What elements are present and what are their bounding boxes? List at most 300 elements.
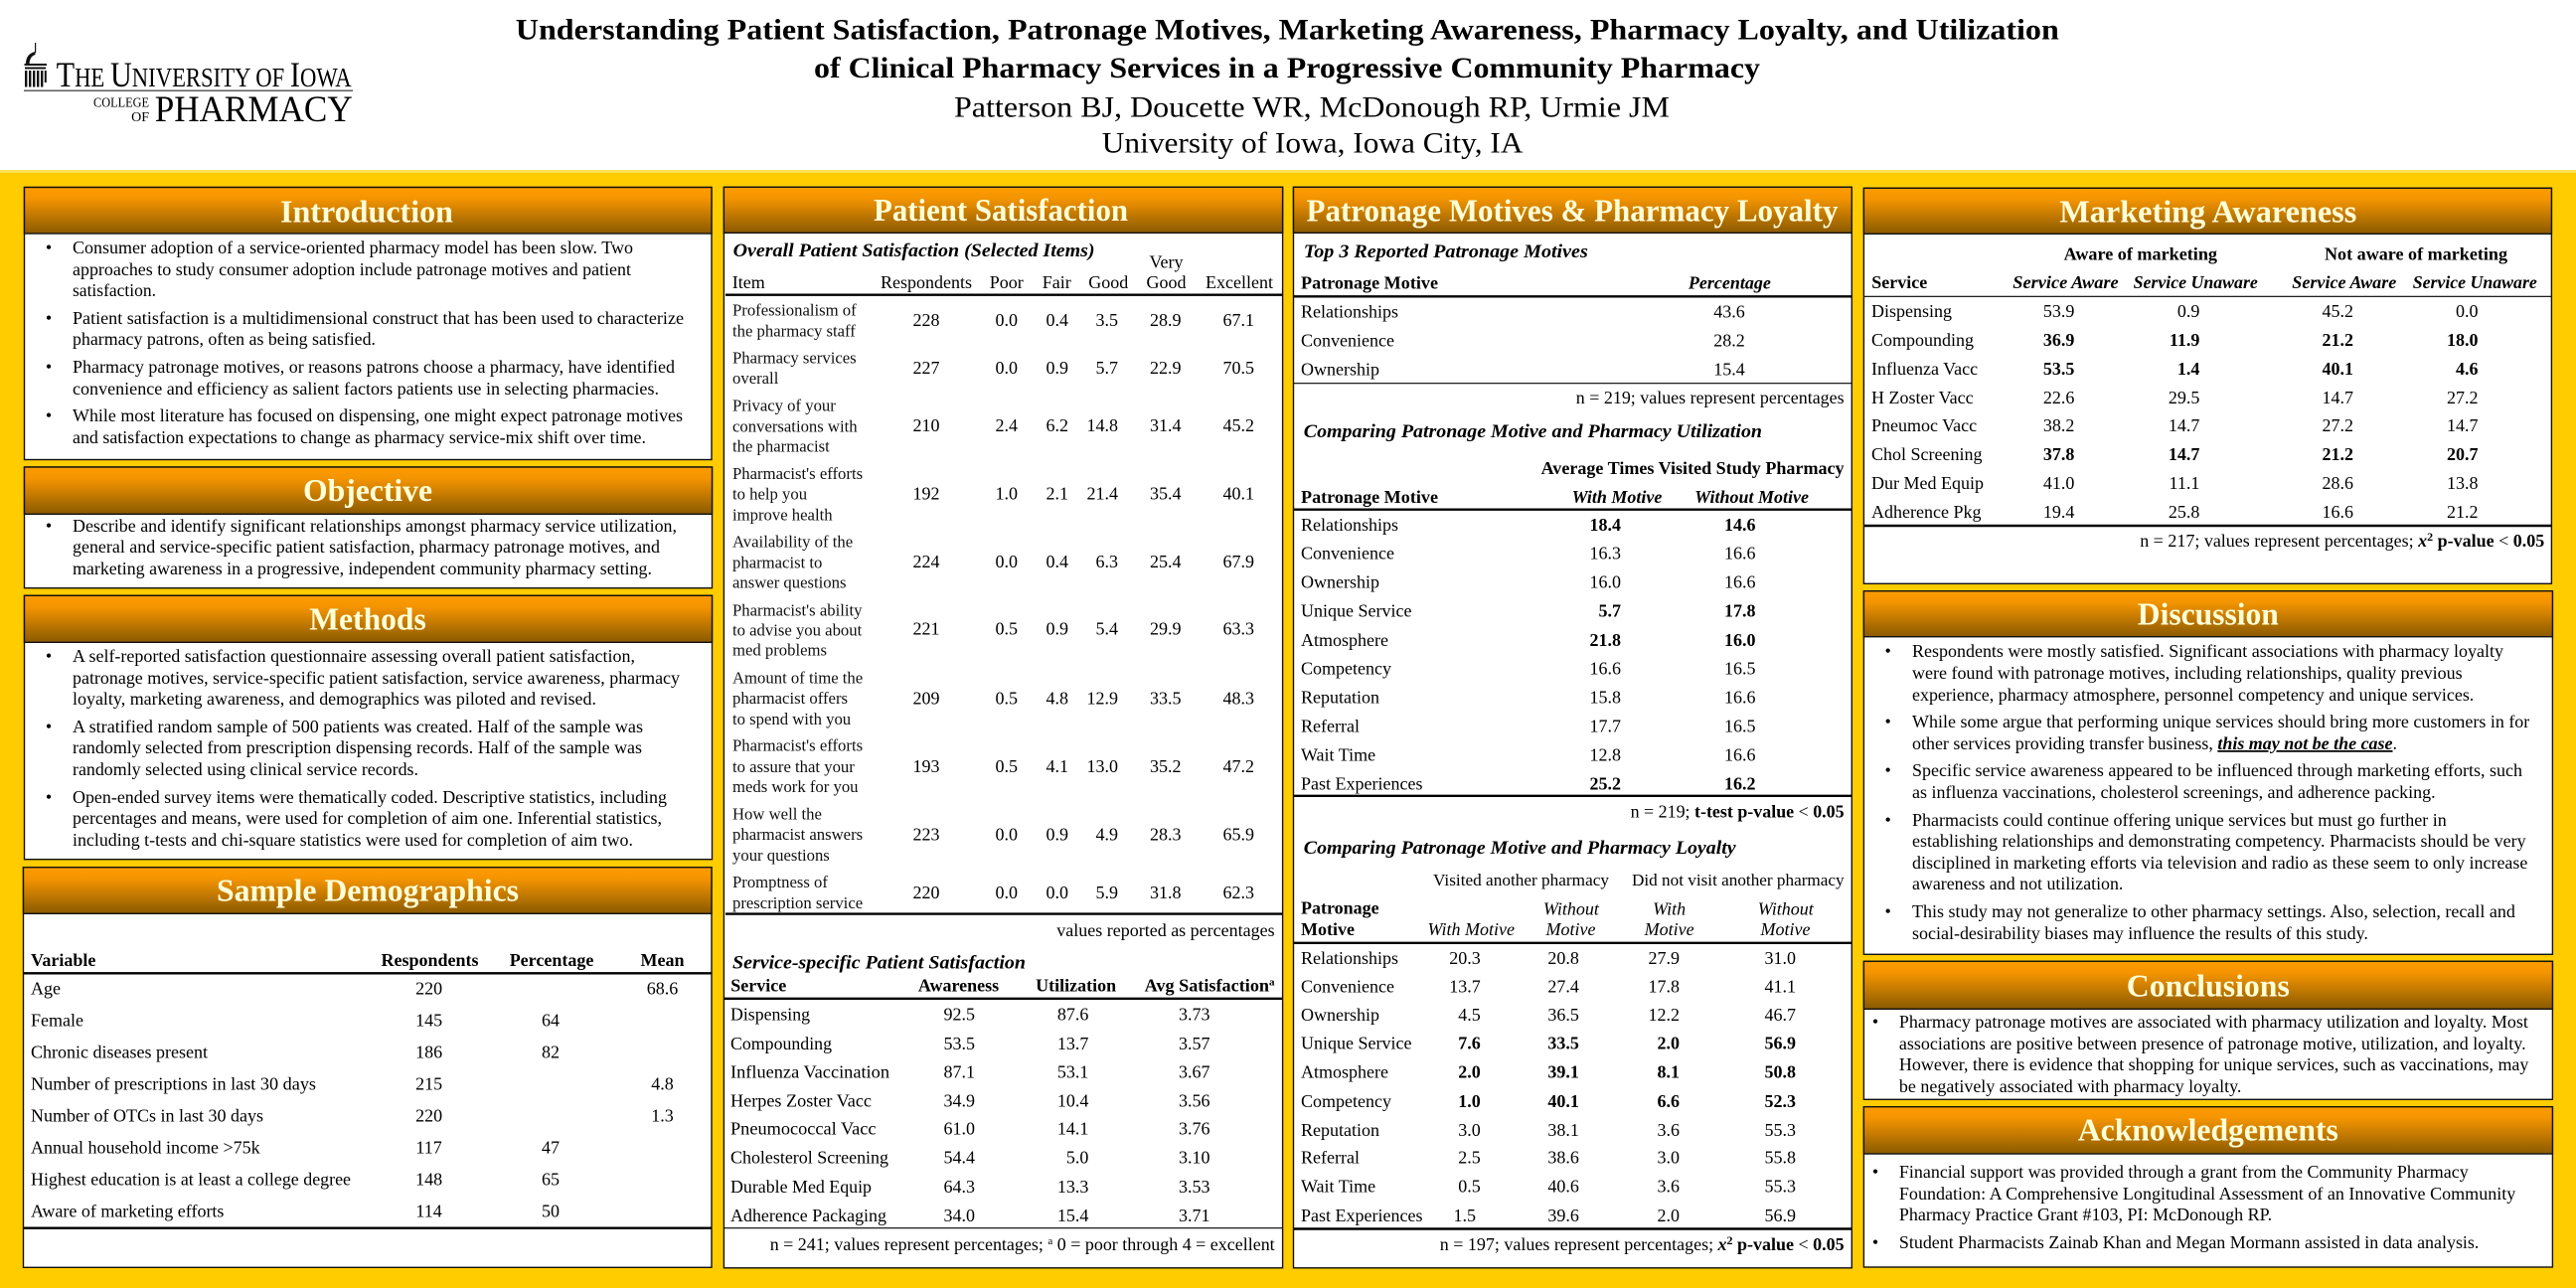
table: patronage motive and loyalty: 55.3 <box>1765 1120 1796 1140</box>
table: overall patient satisfaction: meds work for you <box>732 777 859 796</box>
table: demographics: 148 <box>415 1170 442 1190</box>
table: overall patient satisfaction: overall <box>732 369 779 388</box>
table: marketing awareness <box>1864 244 2551 551</box>
table: patronage motive and loyalty: 4.5 <box>1458 1005 1481 1025</box>
table: patronage motive and utilization: Wait Time <box>1301 745 1375 765</box>
table: overall patient satisfaction: Promptness of <box>732 873 828 891</box>
table: overall patient satisfaction: the pharmacist <box>732 436 830 455</box>
table: service-specific patient satisfaction: Cholesterol Screening <box>730 1148 888 1168</box>
table: overall patient satisfaction: pharmacist offers <box>732 689 848 708</box>
table: top 3 patronage motives: 28.2 <box>1713 331 1745 351</box>
heading: Methods: Methods <box>309 601 426 637</box>
table: patronage motive and loyalty: 39.1 <box>1547 1062 1579 1082</box>
text block: discussion bullets: experience, pharmacy atmosphere, personnel competency and unique services. <box>1912 685 2474 705</box>
table: patronage motive and loyalty: 52.3 <box>1765 1091 1796 1111</box>
table: patronage motive and utilization: Without Motive <box>1694 487 1809 507</box>
table: patronage motive and utilization: 16.3 <box>1590 544 1621 564</box>
table: demographics: 145 <box>415 1011 442 1031</box>
text block: introduction bullets: Pharmacy patronage motives, or reasons patrons choose a pharmacy, have identified <box>73 357 675 377</box>
table: overall patient satisfaction: pharmacist answers <box>732 825 863 844</box>
title: Understanding Patient Satisfaction, Patronage Motives, Marketing Awareness, Pharmacy Loyalty, and Utilization <box>516 13 2059 46</box>
table: patronage motive and loyalty: Comparing Patronage Motive and Pharmacy Loyalty <box>1304 838 1736 859</box>
table: service-specific patient satisfaction: Avg Satisfaction <box>1145 976 1268 996</box>
table: service-specific patient satisfaction: Adherence Packaging <box>730 1206 886 1225</box>
table: overall patient satisfaction: Fair <box>1043 272 1071 292</box>
table: patronage motive and loyalty: Without <box>1543 898 1600 918</box>
table: patronage motive and utilization: n = 219; t-test p-value < 0.05 <box>1631 801 1845 821</box>
table: patronage motive and loyalty: 2.0 <box>1458 1062 1481 1082</box>
table: overall patient satisfaction: 67.1 <box>1222 310 1254 330</box>
table: marketing awareness: 20.7 <box>2447 444 2479 464</box>
table: overall patient satisfaction: 220 <box>912 883 940 902</box>
table: service-specific patient satisfaction: 3.56 <box>1179 1091 1210 1111</box>
table: patronage motive and utilization: Ownership <box>1301 572 1379 592</box>
text block: discussion bullets: • <box>1885 901 1891 921</box>
table: overall patient satisfaction: 70.5 <box>1222 358 1254 378</box>
table: overall patient satisfaction: 22.9 <box>1150 358 1181 378</box>
table: service-specific patient satisfaction: 15.4 <box>1057 1206 1088 1225</box>
table: patronage motive and loyalty: 40.6 <box>1547 1177 1579 1197</box>
table: service-specific patient satisfaction: Pneumococcal Vacc <box>730 1119 877 1139</box>
table: overall patient satisfaction: 47.2 <box>1222 756 1254 776</box>
table: service-specific patient satisfaction: 14.1 <box>1057 1119 1088 1139</box>
table: overall patient satisfaction: 40.1 <box>1222 484 1254 504</box>
table: demographics: 47 <box>542 1138 560 1158</box>
text block: conclusions: associations are positive between presence of patronage motive, utilization, and loyalty. <box>1899 1034 2526 1053</box>
heading: Discussion: Discussion <box>2138 595 2279 631</box>
table: overall patient satisfaction: med problems <box>732 640 827 659</box>
table: patronage motive and utilization: 16.6 <box>1724 745 1755 765</box>
table: overall patient satisfaction: 5.9 <box>1095 883 1118 902</box>
table: marketing awareness: 14.7 <box>2169 444 2199 464</box>
table: service-specific patient satisfaction: Awareness <box>918 976 999 996</box>
table: overall patient satisfaction: Poor <box>990 272 1024 292</box>
text block: acknowledgements <box>1872 1162 2516 1252</box>
table: overall patient satisfaction: 4.1 <box>1046 756 1068 776</box>
table: service-specific patient satisfaction: 3.10 <box>1179 1148 1210 1168</box>
table: overall patient satisfaction: 35.4 <box>1150 484 1181 504</box>
table: marketing awareness: 21.2 <box>2322 330 2353 350</box>
table: patronage motive and loyalty: 33.5 <box>1547 1034 1579 1053</box>
table: demographics: 64 <box>542 1011 560 1031</box>
table: top 3 patronage motives <box>1294 242 1852 407</box>
text block: introduction bullets: Patient satisfaction is a multidimensional construct that has been used to characterize <box>73 308 684 328</box>
text block: discussion bullets <box>1885 641 2529 943</box>
table: overall patient satisfaction: prescription service <box>732 893 863 912</box>
table: overall patient satisfaction: 223 <box>912 824 940 844</box>
text block: discussion bullets: While some argue that performing unique services should bring more customers in for <box>1912 712 2529 731</box>
table: patronage motive and loyalty: 31.0 <box>1765 948 1796 968</box>
panel: Objective <box>24 467 712 588</box>
table: marketing awareness: 21.2 <box>2447 502 2479 522</box>
table: patronage motive and loyalty: 2.5 <box>1458 1148 1481 1168</box>
table: patronage motive and loyalty: 3.0 <box>1658 1148 1680 1168</box>
table: top 3 patronage motives: Top 3 Reported Patronage Motives <box>1304 242 1588 262</box>
table: marketing awareness: 1.4 <box>2177 359 2199 379</box>
table: marketing awareness: Dispensing <box>1871 301 1952 321</box>
table: patronage motive and loyalty: 56.9 <box>1765 1206 1796 1225</box>
text block: objective <box>46 516 677 578</box>
table: overall patient satisfaction: Good <box>1147 272 1187 292</box>
table: overall patient satisfaction: 6.3 <box>1095 552 1118 571</box>
table: patronage motive and utilization: 16.6 <box>1724 572 1755 592</box>
table: patronage motive and loyalty: 13.7 <box>1449 977 1481 997</box>
table: patronage motive and utilization: 16.0 <box>1724 630 1755 650</box>
table: marketing awareness: 36.9 <box>2043 330 2074 350</box>
table: overall patient satisfaction: 62.3 <box>1222 883 1254 902</box>
table: marketing awareness: 53.9 <box>2043 301 2074 321</box>
table: service-specific patient satisfaction: 92.5 <box>944 1005 975 1025</box>
table: overall patient satisfaction: pharmacist to <box>732 553 822 571</box>
table: patronage motive and loyalty: 36.5 <box>1547 1005 1579 1025</box>
table: overall patient satisfaction: 12.9 <box>1087 688 1118 708</box>
table: marketing awareness: Not aware of marketing <box>2325 244 2507 264</box>
heading: Conclusions: Conclusions <box>2127 967 2290 1003</box>
table: overall patient satisfaction: 6.2 <box>1046 415 1068 435</box>
table: overall patient satisfaction: 0.5 <box>996 756 1018 776</box>
table: overall patient satisfaction: 4.8 <box>1046 688 1068 708</box>
table: marketing awareness: H Zoster Vacc <box>1871 388 1974 407</box>
table: overall patient satisfaction: Very <box>1149 251 1183 271</box>
text block: introduction bullets: • <box>46 405 52 425</box>
table: patronage motive and loyalty: Motive <box>1644 919 1694 939</box>
text block: acknowledgements: Financial support was provided through a grant from the Community Pharmacy <box>1899 1162 2469 1182</box>
table: overall patient satisfaction: 28.9 <box>1150 310 1181 330</box>
table: demographics: 220 <box>415 979 442 999</box>
table: patronage motive and loyalty <box>1294 838 1852 1254</box>
table: patronage motive and loyalty: 2.0 <box>1658 1206 1680 1225</box>
table: marketing awareness: 27.2 <box>2447 388 2479 407</box>
table: patronage motive and utilization: Competency <box>1301 658 1391 678</box>
table: patronage motive and loyalty: 2 <box>1727 1233 1733 1247</box>
table: top 3 patronage motives: 15.4 <box>1713 359 1745 379</box>
table: patronage motive and loyalty: 7.6 <box>1458 1034 1481 1053</box>
heading: Acknowledgements <box>1863 1107 2552 1154</box>
table: demographics: 82 <box>542 1043 560 1062</box>
table: service-specific patient satisfaction: 54.4 <box>944 1148 975 1168</box>
table: service-specific patient satisfaction: 5.0 <box>1066 1148 1088 1168</box>
table: patronage motive and loyalty: Motive <box>1545 919 1595 939</box>
table: service-specific patient satisfaction: 34.0 <box>944 1206 975 1225</box>
table: patronage motive and loyalty: 41.1 <box>1765 977 1796 997</box>
table: overall patient satisfaction: 35.2 <box>1150 756 1181 776</box>
panel: Methods <box>24 595 712 860</box>
table: overall patient satisfaction: 28.3 <box>1150 824 1181 844</box>
text block: discussion bullets: • <box>1885 712 1891 731</box>
table: overall patient satisfaction: 0.4 <box>1046 552 1068 571</box>
table: marketing awareness: Influenza Vacc <box>1871 359 1978 379</box>
table: patronage motive and utilization: 21.8 <box>1590 630 1621 650</box>
text block: methods bullets: randomly selected using clinical service records. <box>73 759 418 779</box>
table: marketing awareness: 22.6 <box>2043 388 2074 407</box>
table: overall patient satisfaction: Respondents <box>881 272 972 292</box>
table: overall patient satisfaction: your questions <box>732 846 830 865</box>
table: overall patient satisfaction: 0.0 <box>996 824 1018 844</box>
table: demographics: Annual household income >75k <box>31 1138 260 1158</box>
table: patronage motive and loyalty: Motive <box>1760 919 1810 939</box>
table: overall patient satisfaction: Pharmacist's efforts <box>732 736 863 755</box>
table: patronage motive and loyalty: With Motive <box>1427 919 1515 939</box>
title: of Clinical Pharmacy Services in a Progressive Community Pharmacy <box>814 52 1760 84</box>
table: patronage motive and loyalty: 50.8 <box>1765 1062 1796 1082</box>
table: demographics: Number of OTCs in last 30 days <box>31 1106 263 1126</box>
table: overall patient satisfaction: 228 <box>912 310 940 330</box>
table: marketing awareness: 27.2 <box>2322 415 2353 435</box>
panel: Marketing Awareness <box>1863 188 2551 583</box>
table: overall patient satisfaction: How well the <box>732 805 822 824</box>
table: overall patient satisfaction: 63.3 <box>1222 619 1254 639</box>
table: overall patient satisfaction: 45.2 <box>1222 415 1254 435</box>
text block: introduction bullets: • <box>46 308 52 328</box>
table: patronage motive and utilization <box>1294 421 1852 821</box>
table: service-specific patient satisfaction: Service <box>730 976 786 996</box>
table: overall patient satisfaction: to advise you about <box>732 620 863 639</box>
table: top 3 patronage motives: Patronage Motive <box>1301 273 1438 293</box>
table: overall patient satisfaction: 48.3 <box>1222 688 1254 708</box>
text block: discussion bullets: Respondents were mostly satisfied. Significant associations with pharmacy loyalty <box>1912 641 2503 661</box>
table: patronage motive and loyalty: 17.8 <box>1648 977 1680 997</box>
table: overall patient satisfaction: 5.7 <box>1095 358 1118 378</box>
table: overall patient satisfaction: 0.9 <box>1046 824 1068 844</box>
panel: Patronage Motives & Pharmacy Loyalty <box>1294 187 1852 1268</box>
table: marketing awareness: 11.1 <box>2170 473 2199 493</box>
table: service-specific patient satisfaction: 3.57 <box>1179 1034 1210 1053</box>
table: overall patient satisfaction: the pharmacy staff <box>732 321 856 340</box>
table: marketing awareness: 19.4 <box>2043 502 2074 522</box>
table: patronage motive and utilization: 15.8 <box>1590 688 1621 708</box>
table: patronage motive and loyalty: Referral <box>1301 1148 1360 1168</box>
table: patronage motive and loyalty: 3.0 <box>1458 1120 1481 1140</box>
text block: introduction bullets: convenience and efficiency as salient factors patients use in selecting pharmacies. <box>73 379 659 399</box>
table: patronage motive and loyalty: With <box>1653 898 1686 918</box>
text block: objective: Describe and identify significant relationships amongst pharmacy service utilization, <box>73 516 677 536</box>
table: patronage motive and loyalty: Convenience <box>1301 977 1394 997</box>
table: demographics: Age <box>31 979 61 999</box>
text block: methods bullets: percentages and means, were used for completion of aim one. Inferential statistics, <box>73 808 662 828</box>
text block: methods bullets: • <box>46 787 52 807</box>
text block: discussion bullets: as influenza vaccinations, cholesterol screenings, and adherence packing. <box>1912 782 2436 802</box>
table: patronage motive and utilization: 14.6 <box>1724 515 1755 535</box>
table: marketing awareness: 37.8 <box>2043 444 2074 464</box>
table: overall patient satisfaction <box>725 241 1282 940</box>
table: patronage motive and loyalty: Without <box>1758 898 1815 918</box>
table: demographics: Highest education is at least a college degree <box>31 1170 351 1190</box>
table: overall patient satisfaction: Excellent <box>1206 272 1273 292</box>
panel: Acknowledgements <box>1863 1107 2552 1267</box>
table: marketing awareness: 29.5 <box>2169 388 2199 407</box>
text block: acknowledgements: • <box>1872 1162 1878 1182</box>
table: marketing awareness: Chol Screening <box>1871 444 1982 464</box>
table: overall patient satisfaction: 4.9 <box>1095 824 1118 844</box>
table: overall patient satisfaction: 0.9 <box>1046 619 1068 639</box>
table: demographics: Variable <box>31 950 95 970</box>
table: marketing awareness: 21.2 <box>2322 444 2353 464</box>
table: patronage motive and utilization: 16.5 <box>1724 658 1755 678</box>
table: overall patient satisfaction: Privacy of your <box>732 396 836 414</box>
table: patronage motive and utilization: Atmosphere <box>1301 630 1388 650</box>
text block: discussion bullets: establishing relationships and demonstrating competency. Pharmacists should be very <box>1912 831 2526 851</box>
text block: methods bullets: randomly selected from prescription dispensing records. Half of the sample was <box>73 737 642 757</box>
table: patronage motive and loyalty: 3.6 <box>1658 1177 1680 1197</box>
table: overall patient satisfaction: to assure that your <box>732 757 855 776</box>
table: patronage motive and loyalty: Visited another pharmacy <box>1433 871 1610 889</box>
table: overall patient satisfaction: 25.4 <box>1150 552 1181 571</box>
table: patronage motive and loyalty: Patronage <box>1301 898 1379 918</box>
table: service-specific patient satisfaction: 3.76 <box>1179 1119 1210 1139</box>
heading: Objective <box>24 467 712 514</box>
text block: methods bullets: • <box>46 717 52 736</box>
table: demographics: 186 <box>415 1043 442 1062</box>
table: patronage motive and loyalty: Wait Time <box>1301 1177 1375 1197</box>
table: patronage motive and loyalty: 0.5 <box>1458 1177 1481 1197</box>
table: overall patient satisfaction: Amount of time the <box>732 669 863 688</box>
heading: Methods <box>24 595 712 642</box>
table: overall patient satisfaction: 224 <box>912 552 940 571</box>
table: patronage motive and loyalty: 3.6 <box>1658 1120 1680 1140</box>
table: demographics: 50 <box>542 1202 560 1221</box>
table: service-specific patient satisfaction: a <box>1047 1235 1052 1247</box>
table: marketing awareness: 38.2 <box>2043 415 2074 435</box>
table: overall patient satisfaction: Good <box>1088 272 1128 292</box>
table: marketing awareness: Service Aware <box>2292 272 2396 292</box>
table: overall patient satisfaction: 2.4 <box>996 415 1018 435</box>
heading: Sample Demographics <box>24 868 712 913</box>
text block: discussion bullets: other services providing transfer business, this may not be the case . <box>1912 733 2397 753</box>
heading: Introduction: Introduction <box>280 193 453 229</box>
table: marketing awareness: Adherence Pkg <box>1871 502 1981 522</box>
text block: introduction bullets: • <box>46 238 52 257</box>
table: service-specific patient satisfaction: a <box>1269 976 1275 988</box>
table: patronage motive and loyalty: 1.5 <box>1453 1206 1476 1225</box>
table: patronage motive and loyalty: Ownership <box>1301 1005 1379 1025</box>
text block: methods bullets: Open-ended survey items were thematically coded. Descriptive statistics, including <box>73 787 667 807</box>
table: overall patient satisfaction: Availability of the <box>732 532 853 551</box>
table: overall patient satisfaction: improve health <box>732 505 833 524</box>
table: patronage motive and loyalty: Competency <box>1301 1091 1391 1111</box>
table: overall patient satisfaction: 0.5 <box>996 688 1018 708</box>
table: marketing awareness: Service <box>1871 272 1927 292</box>
table: top 3 patronage motives: Ownership <box>1301 359 1379 379</box>
table: marketing awareness: p-value <box>2433 531 2495 551</box>
text block: introduction bullets: approaches to study consumer adoption include patronage motives and patient <box>73 259 631 279</box>
table: demographics: 215 <box>415 1074 442 1094</box>
heading: Conclusions <box>1863 961 2552 1009</box>
table: demographics: Respondents <box>381 950 479 970</box>
table: patronage motive and loyalty: Did not visit another pharmacy <box>1632 871 1845 889</box>
table: patronage motive and loyalty: 55.8 <box>1765 1148 1796 1168</box>
text block: acknowledgements: Pharmacy Practice Grant #103, PI: McDonough RP. <box>1899 1205 2272 1224</box>
table: overall patient satisfaction: Pharmacist's efforts <box>732 464 863 483</box>
table: marketing awareness: 45.2 <box>2322 301 2353 321</box>
table: patronage motive and utilization: Convenience <box>1301 544 1394 564</box>
table: demographics: Percentage <box>510 950 593 970</box>
table: marketing awareness: Pneumoc Vacc <box>1871 415 1977 435</box>
table: patronage motive and loyalty: 12.2 <box>1648 1005 1680 1025</box>
table: overall patient satisfaction: 31.8 <box>1150 883 1181 902</box>
table: overall patient satisfaction: Item <box>732 272 765 292</box>
table: patronage motive and loyalty: 40.1 <box>1547 1091 1579 1111</box>
table: marketing awareness: Aware of marketing <box>2064 244 2217 264</box>
text block: methods bullets: loyalty, marketing awareness, and demographics was piloted and revised. <box>73 689 596 709</box>
table: service-specific patient satisfaction: 13.7 <box>1057 1034 1088 1053</box>
table: patronage motive and utilization: 16.0 <box>1590 572 1621 592</box>
table: service-specific patient satisfaction: 13.3 <box>1057 1177 1088 1197</box>
table: patronage motive and utilization: 16.5 <box>1724 716 1755 735</box>
text block: methods bullets: A stratified random sample of 500 patients was created. Half of the sample was <box>73 717 643 736</box>
table: service-specific patient satisfaction <box>724 952 1282 1254</box>
text block: introduction bullets <box>46 238 684 447</box>
table: patronage motive and utilization: Comparing Patronage Motive and Pharmacy Utilization <box>1304 421 1762 442</box>
table: overall patient satisfaction: 0.0 <box>996 310 1018 330</box>
panel: Conclusions <box>1863 961 2552 1099</box>
authors: Patterson BJ, Doucette WR, McDonough RP, Urmie JM <box>954 90 1670 123</box>
table: patronage motive and utilization: 18.4 <box>1590 515 1621 535</box>
table: patronage motive and utilization: 16.6 <box>1590 658 1621 678</box>
table: overall patient satisfaction: 29.9 <box>1150 619 1181 639</box>
text block: methods bullets: • <box>46 646 52 666</box>
table: demographics: 1.3 <box>651 1106 674 1126</box>
table: marketing awareness: Service Unaware <box>2134 272 2258 292</box>
table: marketing awareness: Compounding <box>1871 330 1974 350</box>
table: marketing awareness: 14.7 <box>2322 388 2353 407</box>
text block: objective: marketing awareness in a progressive, independent community pharmacy setting. <box>73 559 652 578</box>
table: demographics: 117 <box>415 1138 442 1158</box>
text block: discussion bullets: • <box>1885 810 1891 830</box>
text block: discussion bullets: social-desirability biases may influence the results of this study. <box>1912 923 2368 943</box>
panel: Discussion <box>1863 591 2552 954</box>
table: patronage motive and loyalty: 8.1 <box>1658 1062 1680 1082</box>
text block: introduction bullets: and satisfaction expectations to change as pharmacy service-mix shift over time. <box>73 427 646 447</box>
table: patronage motive and loyalty: 27.9 <box>1648 948 1680 968</box>
table: overall patient satisfaction: 0.0 <box>996 552 1018 571</box>
table: patronage motive and utilization: 16.6 <box>1724 544 1755 564</box>
logo: University of Iowa College of Pharmacy: OF <box>131 110 149 125</box>
table: overall patient satisfaction: 0.0 <box>996 358 1018 378</box>
text block: conclusions: However, there is evidence that shopping for unique services, such as vaccinations, may <box>1899 1054 2529 1074</box>
table: patronage motive and utilization: 17.8 <box>1724 601 1755 621</box>
table: top 3 patronage motives: Relationships <box>1301 302 1398 322</box>
table: patronage motive and utilization: Unique Service <box>1301 601 1411 621</box>
heading: Objective: Objective <box>303 472 432 508</box>
title: University of Iowa, Iowa City, IA <box>1102 126 1524 159</box>
table: patronage motive and loyalty: 38.1 <box>1547 1120 1579 1140</box>
table: marketing awareness: 11.9 <box>2170 330 2199 350</box>
text block: introduction bullets: pharmacy patrons, often as being satisfied. <box>73 329 376 349</box>
table: service-specific patient satisfaction: 64.3 <box>944 1177 975 1197</box>
text block: discussion bullets: awareness and not utilization. <box>1912 874 2123 893</box>
table: overall patient satisfaction: 193 <box>912 756 940 776</box>
text block: conclusions: • <box>1872 1012 1878 1032</box>
text block: discussion bullets: were found with patronage motives, including relationships, quality previous <box>1912 663 2463 683</box>
heading: Sample Demographics: Sample Demographics <box>217 873 519 908</box>
table: service-specific patient satisfaction: n = 241; values represent percentages; <box>770 1234 1044 1254</box>
text block: methods bullets: including t-tests and chi-square statistics were used for completion of aim two. <box>73 830 633 850</box>
table: marketing awareness: 16.6 <box>2322 502 2353 522</box>
text block: acknowledgements: • <box>1872 1232 1878 1252</box>
table: patronage motive and utilization: 17.7 <box>1590 716 1621 735</box>
text block: discussion bullets: Pharmacists could continue offering unique services but must go further in <box>1912 810 2447 830</box>
table: demographics: Number of prescriptions in last 30 days <box>31 1074 316 1094</box>
table: patronage motive and loyalty: 56.9 <box>1765 1034 1796 1053</box>
table: patronage motive and utilization: Relationships <box>1301 515 1398 535</box>
table: patronage motive and loyalty: Unique Service <box>1301 1034 1411 1053</box>
table: patronage motive and loyalty: Motive <box>1301 919 1355 939</box>
table: marketing awareness: 2 <box>2427 530 2433 544</box>
table: overall patient satisfaction: 209 <box>912 688 940 708</box>
table: marketing awareness: Service Aware <box>2012 272 2119 292</box>
table: patronage motive and loyalty: Relationships <box>1301 948 1398 968</box>
table: patronage motive and loyalty: 20.3 <box>1449 948 1481 968</box>
